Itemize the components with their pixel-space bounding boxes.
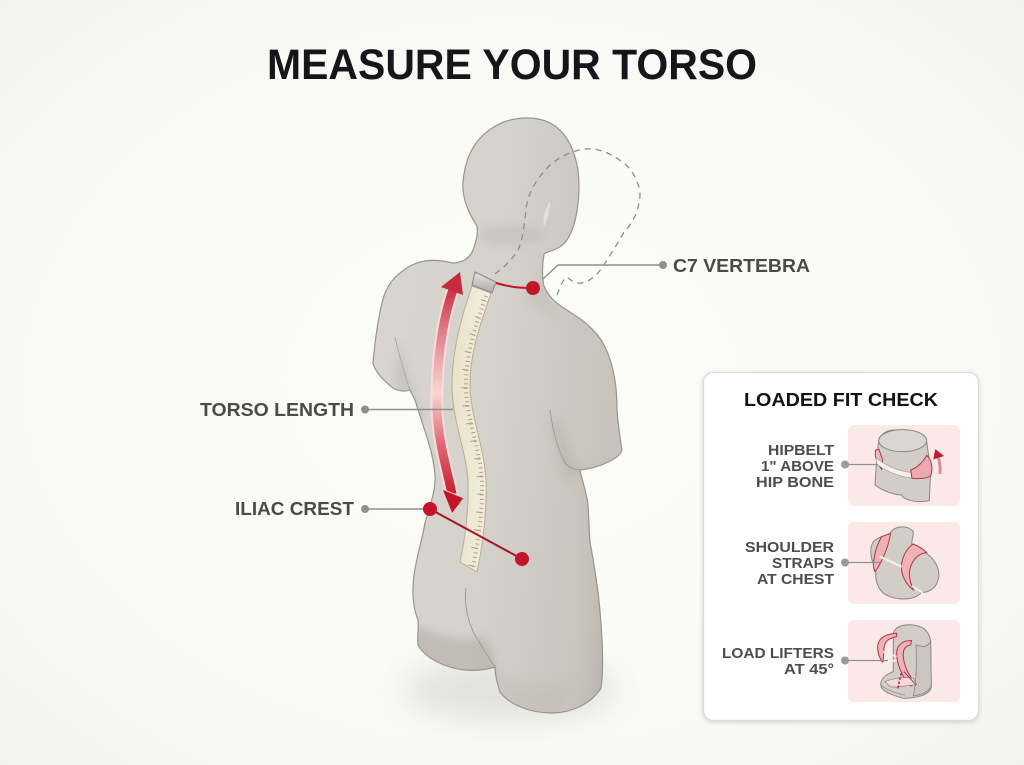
panel: loaded fit check (704, 372, 978, 720)
load lifters icon (878, 625, 931, 698)
C7 marker (496, 281, 540, 295)
row: load lifters (722, 620, 960, 702)
dashed head outline (495, 149, 640, 295)
leader: iliac crest (361, 505, 425, 513)
load lifters label (722, 645, 834, 678)
label: C7 vertebra: C7 VERTEBRA (673, 256, 810, 276)
iliac crest markers (423, 502, 529, 566)
load lifters label: AT 45° (784, 661, 834, 678)
label: iliac crest: ILIAC CREST (235, 499, 354, 519)
hipbelt label: HIP BONE (756, 474, 834, 491)
shoulder straps icon (871, 527, 939, 599)
measuring tape (452, 272, 496, 572)
hipbelt icon (875, 430, 944, 502)
shoulder straps label (745, 539, 834, 588)
shoulder straps label: STRAPS (772, 555, 834, 572)
hipbelt leader (841, 460, 878, 468)
hipbelt label: HIPBELT (768, 442, 834, 459)
load lifters leader (841, 656, 888, 664)
tape metal tab (472, 272, 496, 293)
leader: torso length (361, 406, 453, 414)
ear (543, 200, 550, 228)
hipbelt label: 1" ABOVE (761, 458, 834, 475)
mannequin torso figure (373, 118, 625, 720)
title: MEASURE YOUR TORSO (267, 41, 757, 89)
shoulder straps leader (841, 558, 880, 566)
label: torso length: TORSO LENGTH (200, 400, 354, 420)
panel heading: LOADED FIT CHECK (744, 390, 938, 410)
hipbelt label (756, 442, 834, 491)
load lifters label: LOAD LIFTERS (722, 645, 834, 662)
shoulder straps label: AT CHEST (757, 571, 834, 588)
row: shoulder straps (745, 522, 960, 604)
row: hipbelt (756, 425, 960, 506)
leader: C7 (543, 261, 667, 279)
shoulder straps label: SHOULDER (745, 539, 834, 556)
ground shadow (405, 658, 615, 722)
red double arrow: torso length (437, 272, 464, 514)
